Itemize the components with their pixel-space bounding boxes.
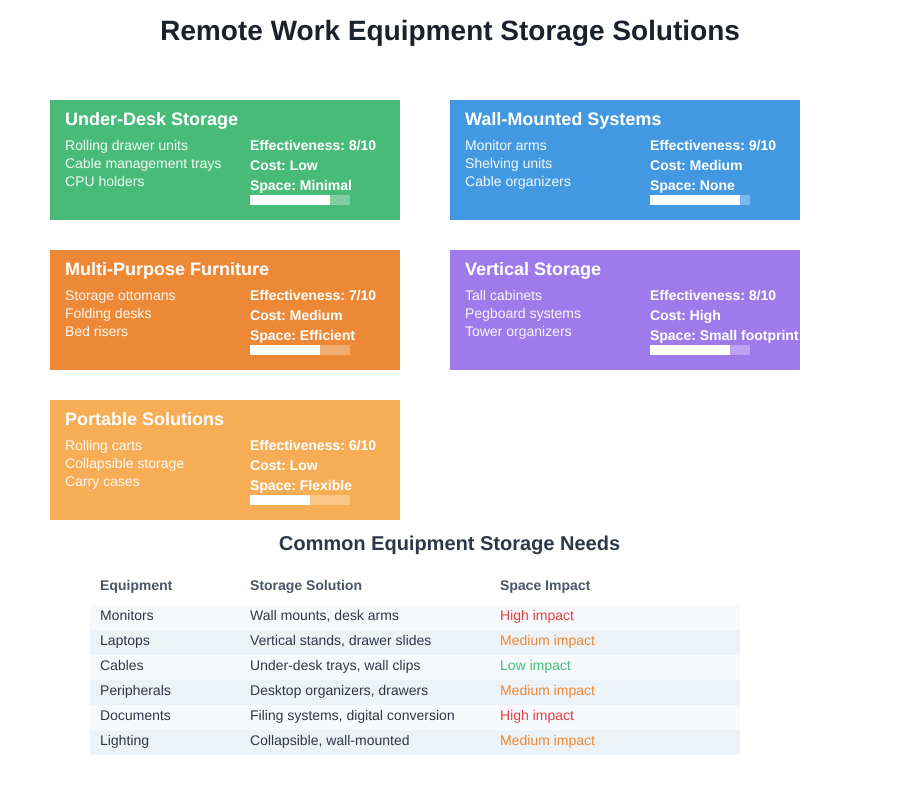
list item: Storage ottomans xyxy=(65,287,176,303)
effectiveness bar xyxy=(650,345,730,355)
row: Cables: Low impact xyxy=(500,657,571,673)
row: Monitors: High impact xyxy=(500,607,574,623)
row: Lighting: Collapsible, wall-mounted xyxy=(250,732,410,748)
row: Laptops: Laptops xyxy=(100,632,150,648)
row: Laptops: Vertical stands, drawer slides xyxy=(250,632,431,648)
list item: Carry cases xyxy=(65,473,140,489)
row: Cables xyxy=(90,655,740,680)
effectiveness: Effectiveness: 7/10 xyxy=(250,287,376,303)
bar track xyxy=(250,345,350,355)
space: Space: Flexible xyxy=(250,477,352,493)
row: Peripherals: Desktop organizers, drawers xyxy=(250,682,428,698)
list item: Bed risers xyxy=(65,323,128,339)
space: Space: None xyxy=(650,177,735,193)
list item: Cable management trays xyxy=(65,155,221,171)
panel heading: Wall-Mounted Systems xyxy=(465,109,661,129)
panel heading: Multi-Purpose Furniture xyxy=(65,259,269,279)
list item: Monitor arms xyxy=(465,137,547,153)
space: Space: Minimal xyxy=(250,177,352,193)
row: Lighting xyxy=(90,730,740,755)
row: Monitors: Monitors xyxy=(100,607,154,623)
panel heading: Under-Desk Storage xyxy=(65,109,238,129)
panel: Portable Solutions xyxy=(50,400,400,520)
row: Monitors xyxy=(90,605,740,630)
effectiveness: Effectiveness: 9/10 xyxy=(650,137,776,153)
list item: Pegboard systems xyxy=(465,305,581,321)
bar track xyxy=(250,195,350,205)
row: Documents xyxy=(90,705,740,730)
cost: Cost: Medium xyxy=(250,307,343,323)
list item: Tall cabinets xyxy=(465,287,542,303)
effectiveness bar xyxy=(650,195,740,205)
table header xyxy=(100,577,590,593)
title: Remote Work Equipment Storage Solutions xyxy=(160,15,740,46)
cost: Cost: Low xyxy=(250,157,318,173)
panel: Vertical Storage xyxy=(450,250,800,370)
row: Monitors: Wall mounts, desk arms xyxy=(250,607,399,623)
row: Documents: Documents xyxy=(100,707,171,723)
list item: Cable organizers xyxy=(465,173,571,189)
panel: Under-Desk Storage xyxy=(50,100,400,220)
space: Space: Small footprint xyxy=(650,327,799,343)
row: Documents: Filing systems, digital conversion xyxy=(250,707,455,723)
column: space impact: Space Impact xyxy=(500,577,590,593)
panel: Wall-Mounted Systems xyxy=(450,100,800,220)
list item: Shelving units xyxy=(465,155,552,171)
effectiveness: Effectiveness: 8/10 xyxy=(250,137,376,153)
list item: Rolling carts xyxy=(65,437,142,453)
table heading: Common Equipment Storage Needs xyxy=(279,533,620,555)
list item: Tower organizers xyxy=(465,323,572,339)
table: equipment storage needs xyxy=(90,577,740,755)
list item: Folding desks xyxy=(65,305,151,321)
cost: Cost: Low xyxy=(250,457,318,473)
panel heading: Portable Solutions xyxy=(65,409,224,429)
row: Peripherals xyxy=(90,680,740,705)
effectiveness bar xyxy=(250,345,320,355)
bar track xyxy=(250,495,350,505)
row: Peripherals: Peripherals xyxy=(100,682,171,698)
list item: CPU holders xyxy=(65,173,144,189)
row: Documents: High impact xyxy=(500,707,574,723)
row: Cables: Under-desk trays, wall clips xyxy=(250,657,420,673)
bar track xyxy=(650,195,750,205)
effectiveness: Effectiveness: 6/10 xyxy=(250,437,376,453)
effectiveness bar xyxy=(250,495,310,505)
cost: Cost: Medium xyxy=(650,157,743,173)
bar track xyxy=(650,345,750,355)
list item: Collapsible storage xyxy=(65,455,184,471)
effectiveness: Effectiveness: 8/10 xyxy=(650,287,776,303)
row: Cables: Cables xyxy=(100,657,144,673)
row: Lighting: Medium impact xyxy=(500,732,595,748)
effectiveness bar xyxy=(250,195,330,205)
panel: Multi-Purpose Furniture xyxy=(50,250,400,370)
row: Peripherals: Medium impact xyxy=(500,682,595,698)
row: Lighting: Lighting xyxy=(100,732,149,748)
cost: Cost: High xyxy=(650,307,721,323)
list item: Rolling drawer units xyxy=(65,137,188,153)
row: Laptops xyxy=(90,630,740,655)
space: Space: Efficient xyxy=(250,327,355,343)
row: Laptops: Medium impact xyxy=(500,632,595,648)
column: storage solution: Storage Solution xyxy=(250,577,362,593)
panel heading: Vertical Storage xyxy=(465,259,601,279)
column: equipment: Equipment xyxy=(100,577,172,593)
